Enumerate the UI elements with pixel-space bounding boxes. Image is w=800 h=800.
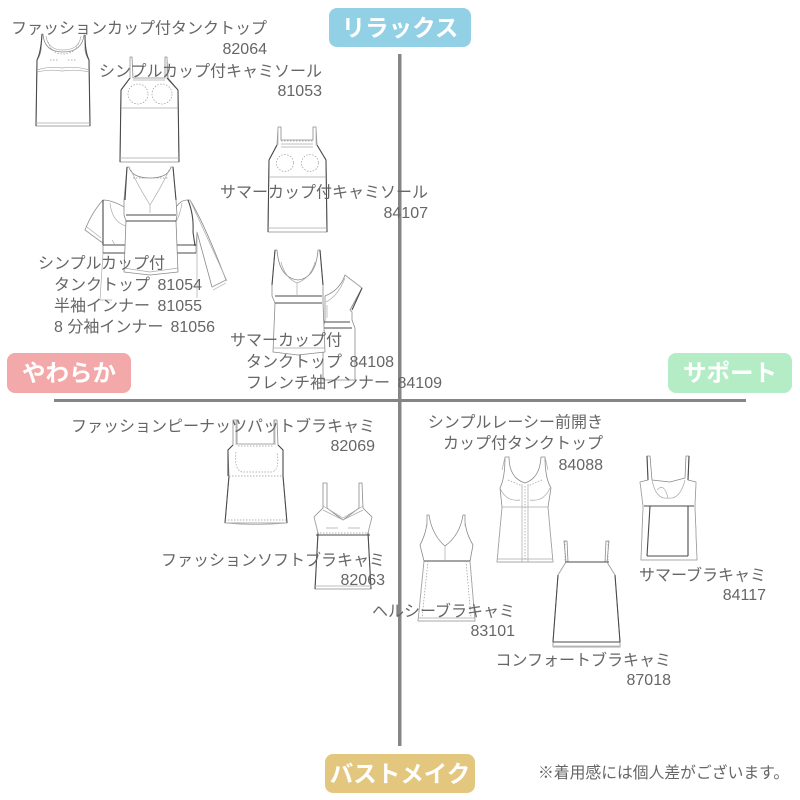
garment: 83101 bra camisole	[418, 515, 475, 621]
label: 84088: 84088	[558, 457, 603, 474]
garment: 81053 camisole	[120, 57, 179, 162]
label: 83101: ヘルシーブラキャミ	[372, 602, 515, 620]
label: 84107: 84107	[384, 205, 428, 222]
badge: リラックス: リラックス	[342, 15, 458, 41]
label: 84088: シンプルレーシー前開き	[428, 414, 603, 432]
label: 84117	[639, 566, 766, 604]
label: 81054 81055 81056: タンクトップ	[54, 276, 150, 294]
label: 87018: コンフォートブラキャミ	[495, 650, 671, 670]
label: 81054 81055 81056: 81055	[158, 298, 202, 315]
garment: 82064 tank top	[36, 34, 90, 126]
label: 83101: 83101	[470, 623, 515, 640]
garment: 84109 french sleeve inner	[323, 275, 362, 380]
label: 81053	[99, 62, 322, 100]
label: 83101	[372, 602, 515, 640]
note: ※着用感には個人差がございます。	[538, 763, 789, 782]
horizontal axis	[54, 399, 746, 402]
garment: 81054 tank top	[124, 167, 178, 275]
label: 81053: 81053	[278, 83, 322, 100]
garment: 87018 bra camisole	[553, 541, 620, 647]
garment: 81055 short sleeve inner	[85, 200, 126, 300]
label: 84108 84109: フレンチ袖インナー	[246, 374, 390, 392]
label: 81054 81055 81056	[38, 254, 215, 336]
garment: 84107 camisole	[268, 127, 327, 232]
badge: サポート	[668, 353, 792, 393]
label: 82063: 82063	[340, 572, 385, 589]
garment: 81056 long sleeve inner	[176, 200, 227, 298]
label: 82069	[71, 416, 375, 455]
garment: 84117 bra camisole	[640, 456, 697, 560]
label: 82069: 82069	[330, 438, 375, 455]
label: 87018: 87018	[626, 672, 671, 689]
label: 81054 81055 81056: シンプルカップ付	[38, 254, 165, 272]
label: 84108 84109	[230, 332, 442, 392]
label: 81054 81055 81056: 8 分袖インナー	[54, 318, 163, 336]
label: 81053: シンプルカップ付キャミソール	[99, 62, 322, 80]
badge: バストメイク: バストメイク	[330, 761, 470, 787]
garment: 82069 bra camisole	[225, 420, 287, 524]
label: 84108 84109: タンクトップ	[246, 353, 342, 371]
label: 84108 84109: 84108	[350, 354, 394, 371]
label: 82064: 82064	[222, 41, 267, 58]
label: 82064: ファッションカップ付タンクトップ	[11, 20, 267, 38]
vertical axis	[398, 54, 402, 746]
garment: 82063 bra camisole	[314, 483, 372, 589]
label: 84088: カップ付タンクトップ	[443, 434, 603, 452]
label: 81054 81055 81056: 81054	[158, 277, 202, 294]
label: 84117: サマーブラキャミ	[639, 566, 766, 584]
badge: やわらか: やわらか	[22, 360, 116, 386]
label: 82063	[161, 550, 385, 589]
garment: 84088 front-open tank top	[497, 457, 553, 562]
label: 87018	[495, 650, 671, 689]
label: 82063: ファッションソフトブラキャミ	[161, 550, 385, 570]
label: 84107: サマーカップ付キャミソール	[220, 184, 428, 202]
label: 81054 81055 81056: 半袖インナー	[54, 297, 150, 315]
label: 82069: ファッションピーナッツパットブラキャミ	[71, 416, 375, 436]
label: 84117: 84117	[723, 587, 766, 604]
label: 84107	[220, 184, 428, 222]
label: 84088	[428, 414, 603, 474]
badge: やわらか	[7, 353, 131, 393]
label: 82064	[11, 20, 267, 58]
label: 81054 81055 81056: 81056	[170, 319, 215, 336]
label: 84108 84109: 84109	[398, 375, 442, 392]
garment: 84108 tank top	[272, 250, 325, 355]
badge: サポート: サポート	[683, 360, 777, 386]
label: 84108 84109: サマーカップ付	[230, 332, 342, 350]
badge: バストメイク	[325, 754, 475, 793]
badge: リラックス	[329, 8, 471, 47]
